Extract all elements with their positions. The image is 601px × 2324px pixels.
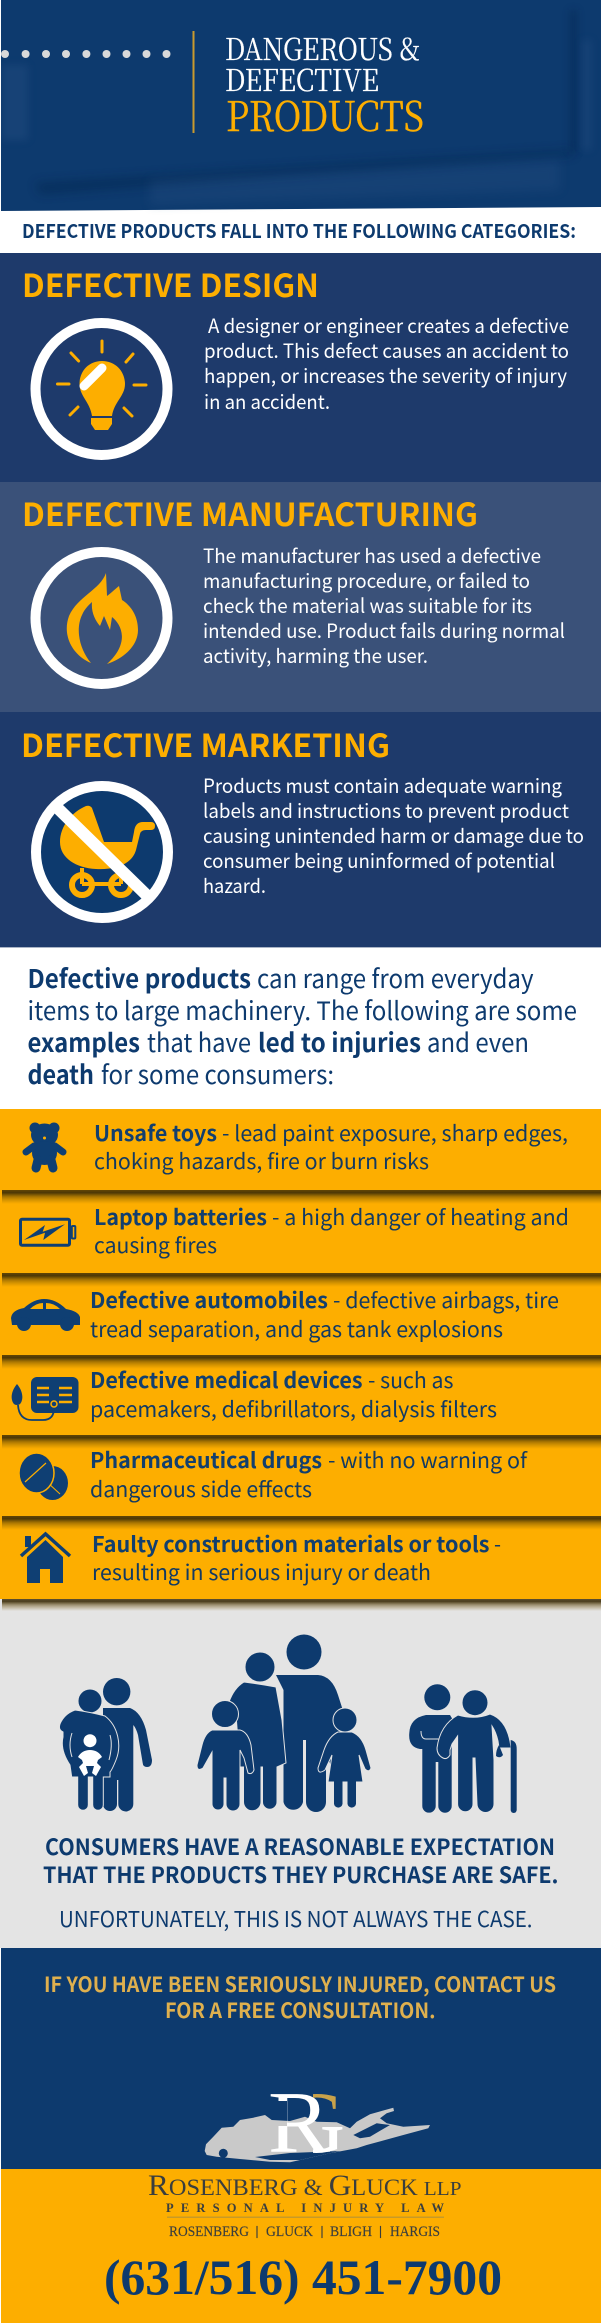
intro paragraph: for some consumers: — [101, 1055, 334, 1092]
row: defective medical devices: Defective medical devices — [90, 1364, 362, 1395]
text block: manufacturing: check the material was suitable for its — [203, 590, 532, 619]
icon: light bulb — [36, 323, 168, 455]
intro paragraph: examples — [28, 1023, 140, 1060]
logo: island and monogram — [204, 2094, 430, 2162]
text block: marketing: Products must contain adequate warning — [203, 770, 562, 799]
partner names: ROSENBERG — [169, 2224, 249, 2240]
logo: island and monogram: G — [285, 2075, 345, 2172]
header panel — [0, 0, 601, 211]
row: laptop batteries — [20, 1201, 569, 1260]
row: faulty construction materials: resulting in serious injury or death — [92, 1556, 431, 1587]
text: reasonable expectation statement: THAT THE PRODUCTS THEY PURCHASE ARE SAFE. — [43, 1858, 558, 1890]
row: defective automobiles: tread separation, and gas tank explosions — [90, 1313, 503, 1344]
row: defective medical devices: pacemakers, defibrillators, dialysis filters — [90, 1393, 497, 1424]
text: call to action: IF YOU HAVE BEEN SERIOUSLY INJURED, CONTACT US — [44, 1969, 556, 1999]
intro paragraph: can range from everyday — [257, 959, 534, 996]
title: PRODUCTS — [226, 84, 424, 143]
icon: pills — [19, 1453, 68, 1500]
text block: marketing: consumer being uninformed of potential — [203, 845, 555, 874]
panel: consumers expectation — [0, 1599, 601, 1948]
icon: family of four — [197, 1634, 371, 1812]
text: reasonable expectation statement: CONSUMERS HAVE A REASONABLE EXPECTATION — [45, 1830, 555, 1862]
row: unsafe toys — [26, 1117, 568, 1176]
icon: battery — [20, 1219, 75, 1245]
text: call to action — [44, 1969, 556, 2025]
icon: elderly couple — [409, 1684, 517, 1813]
row: defective medical devices — [12, 1364, 497, 1424]
intro paragraph: and even — [427, 1023, 529, 1060]
intro paragraph: death — [28, 1055, 94, 1092]
icon: pregnant couple — [59, 1678, 152, 1812]
title: DEFECTIVE — [225, 56, 379, 100]
row: faulty construction materials — [21, 1528, 501, 1587]
firm tagline: PERSONAL INJURY LAW — [166, 2201, 444, 2215]
row: pharmaceutical drugs: Pharmaceutical drugs — [90, 1444, 322, 1475]
row: defective automobiles: - defective airbags, tire — [333, 1284, 559, 1315]
text block: manufacturing: manufacturing procedure, or failed to — [203, 565, 530, 594]
partner names: GLUCK — [266, 2224, 313, 2240]
icon: teddy bear — [26, 1122, 63, 1168]
row: pharmaceutical drugs: - with no warning of — [328, 1444, 528, 1475]
text block: design — [204, 310, 569, 415]
row: unsafe toys: - lead paint exposure, sharp edges, — [222, 1117, 568, 1148]
phone number: (631/516) 451-7900 — [104, 2249, 502, 2305]
row: laptop batteries: Laptop batteries — [94, 1201, 267, 1232]
row: unsafe toys: choking hazards, fire or burn risks — [94, 1145, 429, 1176]
icon: car — [11, 1299, 80, 1331]
text: not always the case: UNFORTUNATELY, THIS IS NOT ALWAYS THE CASE. — [59, 1902, 532, 1934]
decorative dots row — [1, 50, 170, 58]
text block: marketing: labels and instructions to prevent product — [203, 795, 570, 824]
firm name: ROSENBERG & GLUCK LLP — [148, 2170, 462, 2202]
row: defective automobiles — [11, 1284, 559, 1344]
text block: design: A designer or engineer creates a defective — [208, 310, 569, 339]
intro paragraph: items to large machinery. The following are some — [28, 991, 577, 1028]
row: faulty construction materials: Faulty construction materials or tools — [92, 1528, 490, 1559]
text block: manufacturing — [203, 540, 565, 669]
text: reasonable expectation statement — [43, 1830, 558, 1890]
text block: design: in an accident. — [204, 386, 330, 415]
panel: defective manufacturing — [0, 482, 601, 712]
icon: house — [21, 1534, 70, 1583]
row: pharmaceutical drugs — [19, 1444, 528, 1504]
row: pharmaceutical drugs: dangerous side effects — [90, 1473, 312, 1504]
text: call to action: FOR A FREE CONSULTATION. — [165, 1995, 436, 2025]
panel: defective marketing — [0, 712, 601, 948]
partner names: HARGIS — [390, 2224, 440, 2240]
partner names — [169, 2224, 440, 2240]
panel: contact call to action — [0, 1948, 601, 2172]
text block: marketing — [203, 770, 584, 899]
heading: defective marketing: DEFECTIVE MARKETING — [21, 721, 390, 767]
text block: manufacturing: The manufacturer has used a defective — [203, 540, 541, 569]
intro paragraph: Defective products — [28, 959, 251, 996]
row: laptop batteries: - a high danger of heating and — [272, 1201, 569, 1232]
row: defective automobiles: Defective automobiles — [90, 1284, 328, 1315]
intro paragraph: that have — [147, 1023, 251, 1060]
panel: examples list — [0, 1109, 601, 1599]
panel: defective design — [0, 253, 601, 482]
icon: flame — [36, 552, 168, 684]
logo: island and monogram: R — [268, 2075, 330, 2172]
icon: prohibited stroller — [36, 786, 168, 918]
panel: firm contact — [0, 2169, 601, 2324]
heading: defective manufacturing: DEFECTIVE MANUFACTURING — [22, 490, 478, 536]
icon: medical device — [12, 1377, 78, 1420]
intro paragraph — [28, 959, 577, 1092]
text block: marketing: hazard. — [203, 870, 266, 899]
text block: manufacturing: intended use. Product fails during normal — [203, 615, 565, 644]
intro paragraph: led to injuries — [258, 1023, 421, 1060]
title: DANGEROUS & — [225, 25, 420, 69]
categories heading strip: DEFECTIVE PRODUCTS FALL INTO THE FOLLOWING CATEGORIES: — [22, 217, 576, 244]
partner names: BLIGH — [330, 2224, 372, 2240]
row: faulty construction materials: - — [494, 1528, 501, 1559]
text block: design: happen, or increases the severity of injury — [204, 360, 567, 389]
text block: manufacturing: activity, harming the user. — [203, 640, 428, 669]
heading: defective design: DEFECTIVE DESIGN — [22, 261, 319, 307]
text block: marketing: causing unintended harm or damage due to — [203, 820, 584, 849]
title — [225, 25, 424, 143]
text block: design: product. This defect causes an accident to — [204, 335, 569, 364]
row: unsafe toys: Unsafe toys — [94, 1117, 217, 1148]
row: laptop batteries: causing fires — [94, 1229, 217, 1260]
row: defective medical devices: - such as — [368, 1364, 454, 1395]
